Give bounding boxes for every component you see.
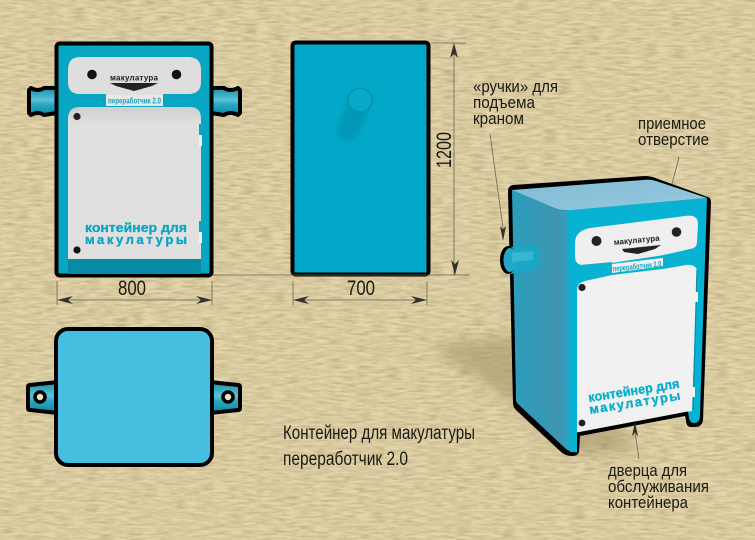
right lug — [210, 382, 240, 413]
dimension: 800: 800 — [118, 277, 146, 300]
door bolts — [73, 113, 81, 120]
callout: crane handles — [473, 77, 558, 241]
title: Контейнер для макулатуры — [283, 423, 475, 444]
door — [68, 107, 201, 259]
container body — [56, 44, 212, 276]
left handle — [29, 88, 57, 115]
floor shadow of 3d container — [430, 335, 640, 455]
callout: service door: контейнера — [608, 493, 688, 512]
callout: receiving opening: отверстие — [638, 130, 709, 149]
lug holes — [35, 392, 45, 402]
upper label panel — [575, 216, 698, 265]
door caption: контейнер для — [85, 220, 187, 235]
door bottom line — [577, 413, 688, 434]
lid — [56, 329, 212, 465]
door hinges — [199, 124, 202, 243]
logo: макулатура: макулатура — [613, 234, 661, 247]
dimension: 800 — [57, 277, 212, 305]
door bolts — [578, 284, 586, 291]
3d view of container — [500, 176, 711, 456]
front face — [568, 198, 707, 452]
handle end — [348, 88, 372, 112]
handle shadow — [348, 102, 360, 130]
left side — [512, 190, 577, 452]
teal tabs under panel — [577, 250, 697, 280]
version strip: переработчик 2.0 — [108, 96, 161, 106]
panel bolts — [87, 70, 97, 79]
callout: crane handles: краном — [473, 109, 524, 128]
side view of container — [292, 42, 428, 274]
title — [283, 423, 475, 470]
callout: receiving opening: приемное — [638, 114, 706, 133]
door — [577, 265, 697, 433]
top face — [512, 180, 707, 210]
callout: service door: обслуживания — [608, 477, 709, 496]
dimension: 700: 700 — [347, 277, 375, 300]
dimension: 700 — [293, 277, 427, 305]
callout: receiving opening — [638, 114, 709, 184]
panel bolts — [592, 236, 602, 246]
base plinth — [68, 259, 201, 274]
top view of container — [28, 329, 240, 465]
door caption — [85, 220, 187, 247]
left lug — [28, 382, 58, 413]
callout: service door: дверца для — [608, 461, 687, 480]
version strip — [106, 95, 163, 106]
body silhouette — [508, 176, 711, 456]
dimension: 1200 — [213, 43, 470, 275]
crane handle — [500, 245, 540, 274]
title: переработчик 2.0 — [283, 449, 408, 470]
callout: crane handles: «ручки» для — [473, 77, 558, 96]
logo: макулатура: макулатура — [110, 74, 159, 82]
logo: макулатура — [613, 234, 661, 254]
version strip: переработчик 2.0 — [612, 259, 662, 273]
logo: макулатура — [110, 74, 159, 91]
dimension: 1200: 1200 — [433, 132, 456, 168]
door caption: макулатуры — [588, 388, 681, 417]
door caption: макулатуры — [85, 232, 187, 247]
door right edge — [693, 270, 697, 410]
upper label panel — [68, 57, 201, 96]
door hinges — [692, 292, 698, 397]
front view of container — [29, 44, 240, 276]
right handle — [211, 88, 240, 115]
door caption: контейнер для — [587, 376, 680, 405]
callout: service door — [608, 422, 709, 512]
callout: crane handles: подъема — [473, 93, 535, 112]
